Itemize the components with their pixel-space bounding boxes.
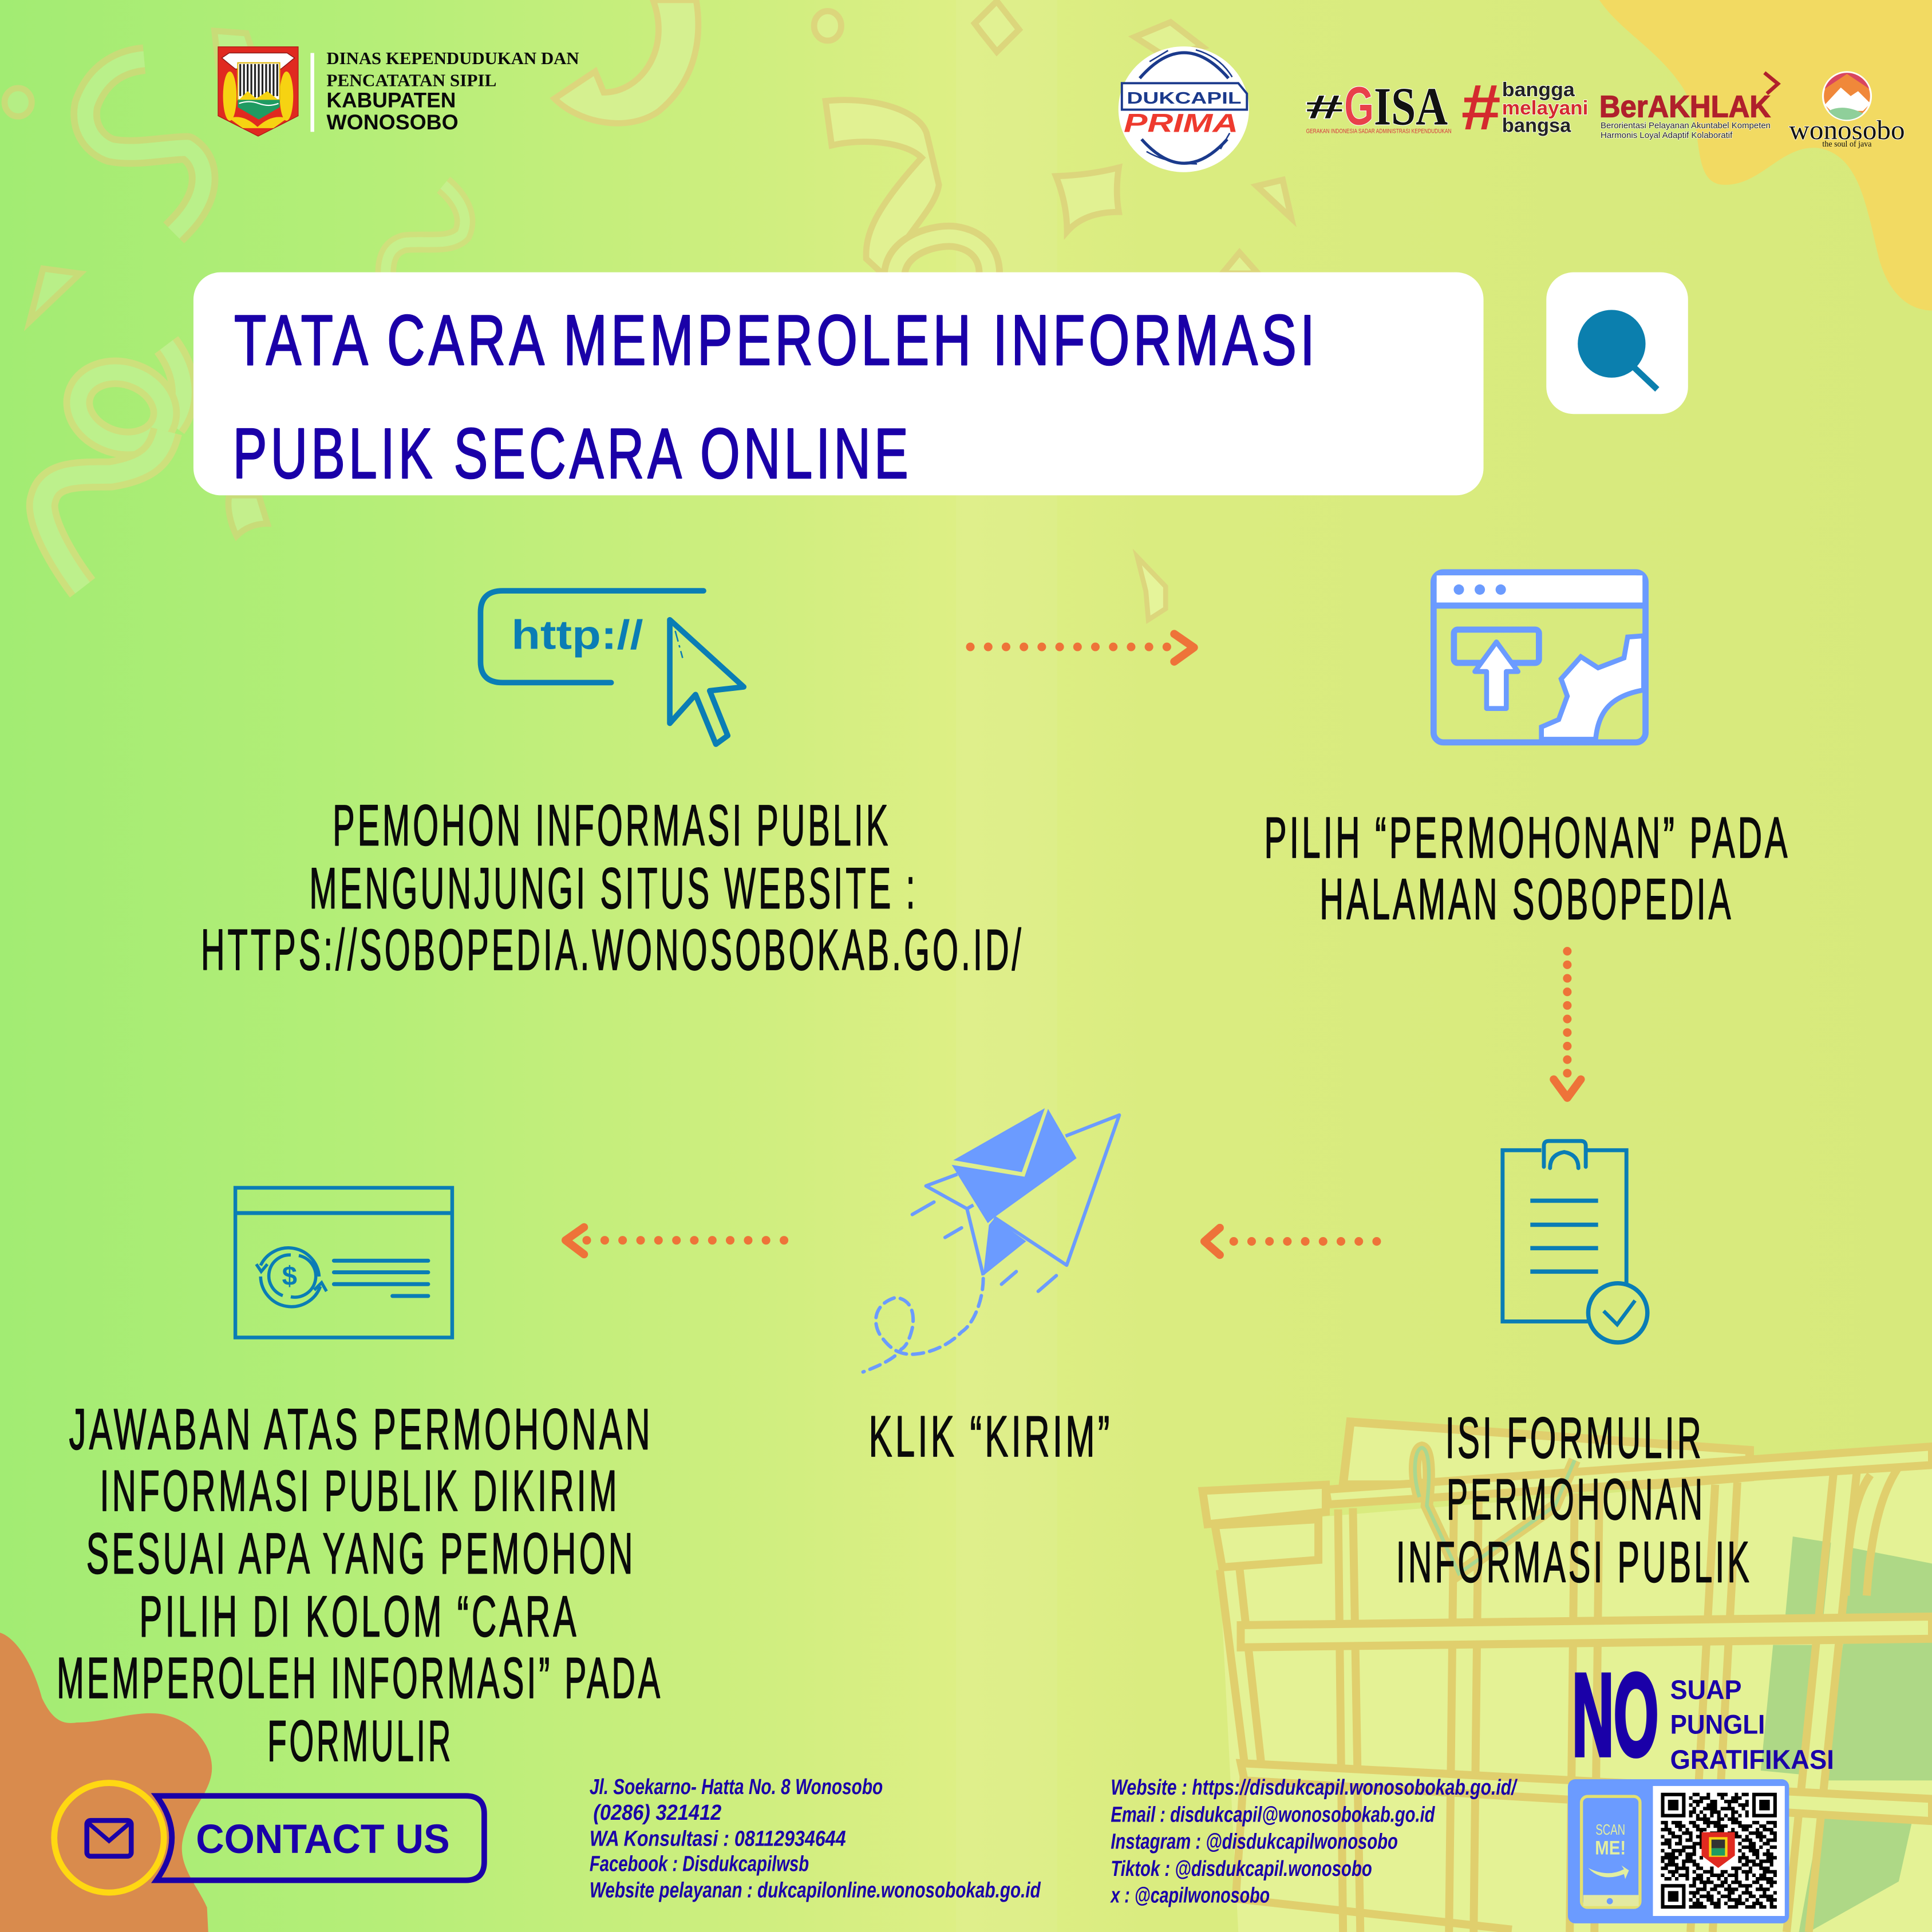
step 5 text: JAWABAN ATAS PERMOHONAN: [69, 1397, 653, 1461]
logo: bangga melayani bangsa: bangga: [1502, 79, 1575, 101]
QR code: [1653, 1786, 1785, 1916]
logo: BerAKHLAK: Berorientasi Pelayanan Akuntabel Kompeten: [1601, 121, 1771, 131]
QR centre crest: [1701, 1832, 1735, 1868]
scan me QR card: [1568, 1779, 1789, 1923]
contact details: online: Instagram : @disdukcapilwonosobo: [1111, 1830, 1398, 1854]
arrow: step 3 to 4: [1204, 1228, 1381, 1255]
contact details: online: Tiktok : @disdukcapil.wonosobo: [1111, 1856, 1372, 1880]
header: [218, 46, 1905, 172]
step 5 text: MEMPEROLEH INFORMASI” PADA: [57, 1646, 663, 1710]
title: [233, 301, 1318, 493]
step 4 text: KLIK “KIRIM”: [868, 1404, 1113, 1469]
contact details: address: [590, 1775, 1041, 1902]
no bribery badge: GRATIFIKASI: [1670, 1745, 1834, 1775]
logo: bangga melayani bangsa: [1461, 72, 1588, 143]
divider: [310, 53, 314, 132]
logo: bangga melayani bangsa: bangsa: [1502, 114, 1571, 136]
step 5 text: FORMULIR: [267, 1709, 453, 1773]
contact details: online: Email : disdukcapil@wonosobokab.go.id: [1111, 1802, 1435, 1826]
contact details: address: (0286) 321412: [593, 1800, 721, 1824]
arrow: step 1 to 2: [966, 634, 1194, 662]
logo: Dukcapil Prima: [1119, 46, 1249, 172]
logo: #GISA: #: [1306, 88, 1343, 127]
arrow: step 4 to 5: [566, 1227, 788, 1254]
contact details: online: [1110, 1775, 1518, 1907]
contact details: address: Facebook : Disdukcapilwsb: [590, 1851, 809, 1875]
step 3 text: ISI FORMULIR: [1445, 1405, 1704, 1470]
logo: BerAKHLAK: BerAKHLAK: [1599, 89, 1771, 124]
step 5 text: [57, 1397, 663, 1773]
logo: Dukcapil Prima: PRIMA: [1124, 108, 1238, 137]
step 5 text: PILIH DI KOLOM “CARA: [139, 1584, 579, 1649]
title panel: [193, 272, 1484, 495]
logo: Dukcapil Prima: DUKCAPIL: [1127, 89, 1242, 108]
logo: Wonosobo the soul of java: wonosobo: [1789, 116, 1905, 145]
contact us button: [54, 1783, 484, 1893]
step 2 text: [1264, 805, 1790, 932]
no bribery badge: NO: [1572, 1650, 1658, 1780]
logo: BerAKHLAK: Harmonis Loyal Adaptif Kolaboratif: [1601, 131, 1733, 140]
step 1 text: PEMOHON INFORMASI PUBLIK: [333, 793, 891, 858]
step 1 text: MENGUNJUNGI SITUS WEBSITE :: [309, 856, 918, 920]
organisation name: KABUPATEN: [326, 88, 456, 112]
logo: #GISA: G: [1344, 76, 1374, 136]
step 3 text: [1396, 1405, 1752, 1595]
organisation name: WONOSOBO: [326, 110, 459, 134]
organisation name: PENCATATAN SIPIL: [326, 71, 496, 90]
logo: Wonosobo the soul of java: the soul of java: [1822, 140, 1872, 149]
step 2 icon: browser upload gear: [1433, 572, 1646, 742]
logo: Kabupaten Wonosobo crest: [218, 47, 298, 136]
no bribery badge: SUAP: [1670, 1675, 1741, 1705]
title: PUBLIK SECARA ONLINE: [233, 414, 912, 493]
step 1 text: HTTPS://SOBOPEDIA.WONOSOBOKAB.GO.ID/: [201, 918, 1024, 982]
contact us button: CONTACT US: [196, 1817, 450, 1862]
step 1 icon: http cursor: [480, 591, 744, 744]
contact details: address: Jl. Soekarno- Hatta No. 8 Wonosobo: [590, 1775, 883, 1799]
logo: bangga melayani bangsa: melayani: [1502, 97, 1588, 119]
step 5 text: INFORMASI PUBLIK DIKIRIM: [100, 1459, 620, 1523]
organisation name: DINAS KEPENDUDUKAN DAN: [326, 49, 579, 68]
arrow: step 2 to 3: [1554, 947, 1581, 1098]
title: TATA CARA MEMPEROLEH INFORMASI: [234, 301, 1318, 380]
icon: phone scan me: SCAN: [1595, 1822, 1625, 1838]
icon: search: [1546, 272, 1688, 414]
step 5 icon: payment document: [235, 1188, 452, 1337]
logo: bangga melayani bangsa: #: [1461, 72, 1501, 143]
logo: Wonosobo the soul of java: [1789, 72, 1905, 149]
step 3 icon: clipboard check: [1503, 1141, 1647, 1342]
step 3 text: PERMOHONAN: [1447, 1467, 1705, 1532]
logo: #GISA: [1306, 76, 1452, 136]
step 5 icon: payment document: $: [282, 1261, 297, 1291]
logo: BerAKHLAK: [1599, 73, 1778, 140]
step 4 icon: paper plane with envelope: [863, 1108, 1119, 1372]
organisation name: [326, 49, 579, 134]
contact details: address: WA Konsultasi : 08112934644: [590, 1826, 846, 1850]
icon: mail: [54, 1783, 164, 1893]
step 1 text: [201, 793, 1024, 982]
contact details: online: Website : https://disdukcapil.wonosobokab.go.id/: [1111, 1775, 1518, 1799]
logo: #GISA: GERAKAN INDONESIA SADAR ADMINISTRASI KEPENDUDUKAN: [1306, 128, 1452, 135]
no bribery badge: [1572, 1650, 1834, 1780]
confetti decoration: [5, 0, 1291, 620]
cart illustration: [1203, 1422, 1932, 1932]
step 5 text: SESUAI APA YANG PEMOHON: [86, 1522, 636, 1586]
contact details: online: x : @capilwonosobo: [1110, 1883, 1270, 1907]
step 1 icon: http cursor: http://: [511, 613, 643, 658]
icon: phone scan me: [1582, 1796, 1640, 1907]
icon: phone scan me: ME!: [1595, 1837, 1626, 1859]
logo: #GISA: ISA: [1374, 77, 1448, 136]
contact details: address: Website pelayanan : dukcapilonline.wonosobokab.go.id: [590, 1878, 1041, 1902]
no bribery badge: PUNGLI: [1670, 1709, 1765, 1740]
